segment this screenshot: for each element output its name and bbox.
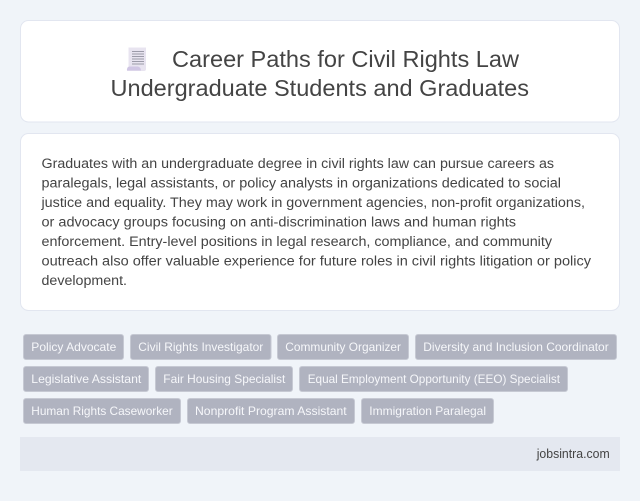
description text: development. xyxy=(42,273,127,289)
description text: justice and equality. They may work in government agencies, non-profit organizations, xyxy=(40,195,585,211)
tag: Equal Employment Opportunity (EEO) Specialist xyxy=(300,366,568,392)
tag: Immigration Paralegal xyxy=(362,398,494,424)
tag: Policy Advocate: Policy Advocate xyxy=(31,340,117,354)
description text: Graduates with an undergraduate degree in civil rights law can pursue careers as xyxy=(42,156,554,172)
tag: Fair Housing Specialist: Fair Housing Specialist xyxy=(163,372,286,386)
footer bar xyxy=(20,437,620,471)
tag: Civil Rights Investigator: Civil Rights Investigator xyxy=(138,340,263,354)
tag: Community Organizer xyxy=(278,334,408,360)
tag: Equal Employment Opportunity (EEO) Specialist: Equal Employment Opportunity (EEO) Specialist xyxy=(308,372,561,386)
title text: Career Paths for Civil Rights Law xyxy=(172,46,520,72)
tag: Fair Housing Specialist xyxy=(156,366,292,392)
panel: description card xyxy=(20,134,620,310)
tag: Human Rights Caseworker xyxy=(24,398,180,424)
description text: or advocacy groups focusing on anti-discrimination laws and human rights xyxy=(42,214,516,230)
tag: Policy Advocate xyxy=(24,334,124,360)
tag: Diversity and Inclusion Coordinator xyxy=(416,334,616,360)
tag: Nonprofit Program Assistant xyxy=(188,398,354,424)
description text xyxy=(40,156,592,289)
tag: Nonprofit Program Assistant: Nonprofit Program Assistant xyxy=(195,404,347,418)
icon: scroll document xyxy=(127,48,146,71)
description text: enforcement. Entry-level positions in legal research, compliance, and community xyxy=(42,234,553,250)
title text: Undergraduate Students and Graduates xyxy=(110,75,529,101)
tag: Civil Rights Investigator xyxy=(130,334,271,360)
tag: Community Organizer: Community Organizer xyxy=(285,340,401,354)
tag: Human Rights Caseworker: Human Rights Caseworker xyxy=(31,404,173,418)
description text: paralegals, legal assistants, or policy analysts in organizations dedicated to social xyxy=(42,176,561,192)
tag: Immigration Paralegal: Immigration Paralegal xyxy=(369,404,486,418)
description text: outreach also offer valuable experience for future roles in civil rights litigation or policy xyxy=(42,254,592,270)
panel: title card xyxy=(20,20,620,122)
footer source text: jobsintra.com xyxy=(536,447,610,461)
tag: Legislative Assistant xyxy=(24,366,148,392)
panel: career path tags xyxy=(24,334,616,424)
tag: Diversity and Inclusion Coordinator: Diversity and Inclusion Coordinator xyxy=(423,340,609,354)
tag: Legislative Assistant: Legislative Assistant xyxy=(31,372,142,386)
title text xyxy=(110,46,529,101)
